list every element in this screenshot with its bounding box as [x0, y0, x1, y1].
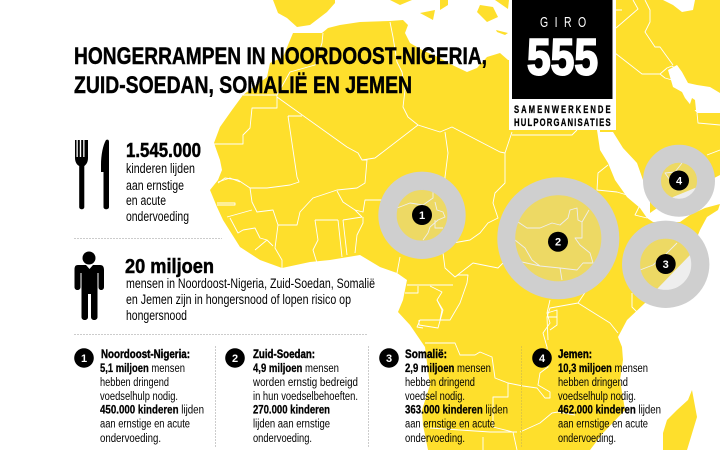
statistic: 1.545.000 children: 1.545.000 [126, 140, 201, 162]
panel: Zuid-Soedan: ondervoeding. [253, 433, 312, 445]
panel: Jemen: 462.000 kinderen lijden [558, 404, 661, 416]
logo: Giro 555: 555 [527, 28, 598, 86]
panel: Zuid-Soedan: 4,9 miljoen mensen [253, 363, 339, 375]
panel: Noordoost-Nigeria: 450.000 kinderen lijden [100, 404, 204, 416]
map marker 1 [412, 205, 432, 225]
map marker 2 [548, 232, 568, 252]
panel: Noordoost-Nigeria: ondervoeding. [100, 433, 161, 445]
map of Africa and the Middle East [210, 0, 720, 450]
panel: Somalië: aan ernstige en acute [405, 418, 495, 430]
logo: Giro 555 [509, 0, 616, 130]
map marker 3: 3 [663, 259, 669, 271]
panel: Somalië [379, 348, 508, 445]
statistic: 20 miljoen people: hongersnood [126, 308, 187, 323]
icon: person [74, 252, 104, 320]
panel: Somalië: 2,9 miljoen mensen [405, 363, 491, 375]
panel: Jemen: voedselhulp nodig. [558, 391, 636, 403]
highlight ring 3: Somalië [631, 230, 700, 299]
panel: Zuid-Soedan: Zuid-Soedan: [253, 349, 315, 361]
panel: Somalië: voedsel nodig. [405, 391, 465, 403]
statistic: 20 miljoen people [125, 256, 375, 323]
panel: Zuid-Soedan [225, 348, 358, 445]
statistic: 20 miljoen people: 20 miljoen [125, 256, 214, 278]
highlight ring 2: Zuid-Soedan [506, 186, 610, 290]
logo: Giro 555: SAMENWERKENDE [514, 104, 611, 116]
title: ZUID-SOEDAN, SOMALIË EN JEMEN [74, 72, 412, 99]
panel: Noordoost-Nigeria: Noordoost-Nigeria: [101, 349, 190, 361]
panel: Somalië: ondervoeding. [405, 433, 465, 445]
panel: Jemen: hebben dringend [558, 377, 628, 389]
highlight ring 1: Noordoost-Nigeria [388, 181, 456, 250]
panel: Zuid-Soedan: 270.000 kinderen [253, 404, 330, 416]
panel: Zuid-Soedan: lijden aan ernstige [253, 418, 330, 430]
highlight ring 4: Jemen [652, 154, 706, 208]
panel: Noordoost-Nigeria: 1 [81, 353, 87, 365]
panel: Zuid-Soedan: in hun voedselbehoeften. [253, 391, 358, 403]
statistic: 1.545.000 children: ondervoeding [126, 209, 189, 224]
logo: Giro 555: GIRO [540, 13, 586, 30]
panel: Zuid-Soedan: 2 [232, 353, 238, 365]
statistic: 1.545.000 children [126, 140, 201, 224]
title: HONGERRAMPEN IN NOORDOOST-NIGERIA, [74, 43, 487, 70]
statistic: 20 miljoen people: en Jemen zijn in hongersnood of lopen risico op [126, 292, 351, 307]
title [74, 43, 487, 99]
panel: Jemen: 4 [539, 353, 546, 365]
panel: Somalië: Somalië: [405, 349, 447, 361]
panel: Somalië: hebben dringend [405, 377, 475, 389]
panel: Jemen: 10,3 miljoen mensen [558, 363, 648, 375]
panel: Jemen [532, 348, 661, 445]
map marker 3 [656, 254, 676, 274]
statistic: 1.545.000 children: en acute [126, 193, 166, 208]
panel: Jemen: ondervoeding. [558, 433, 616, 445]
panel: Noordoost-Nigeria: hebben dringend [100, 377, 169, 389]
panel: Noordoost-Nigeria: aan ernstige en acute [100, 418, 190, 430]
map marker 4 [669, 170, 689, 190]
map marker 4: 4 [676, 176, 683, 188]
panel: Jemen: Jemen: [558, 349, 592, 361]
statistic: 1.545.000 children: aan ernstige [126, 178, 184, 193]
statistic: 20 miljoen people: mensen in Noordoost-Nigeria, Zuid-Soedan, Somalië [126, 276, 375, 291]
panel: Somalië: 3 [386, 353, 392, 365]
map marker 1: 1 [419, 210, 425, 222]
logo: Giro 555: HULPORGANISATIES [514, 117, 611, 129]
icon: fork and knife [75, 140, 109, 209]
map marker 2: 2 [555, 237, 561, 249]
panel: Zuid-Soedan: worden ernstig bedreigd [252, 377, 358, 389]
statistic: 1.545.000 children: kinderen lijden [126, 161, 195, 176]
panel: Jemen: aan ernstige en acute [558, 418, 648, 430]
panel: Noordoost-Nigeria: voedselhulp nodig. [100, 391, 178, 403]
panel: Noordoost-Nigeria [74, 348, 204, 445]
panel: Noordoost-Nigeria: 5,1 miljoen mensen [100, 363, 185, 375]
panel: Somalië: 363.000 kinderen lijden [405, 404, 508, 416]
